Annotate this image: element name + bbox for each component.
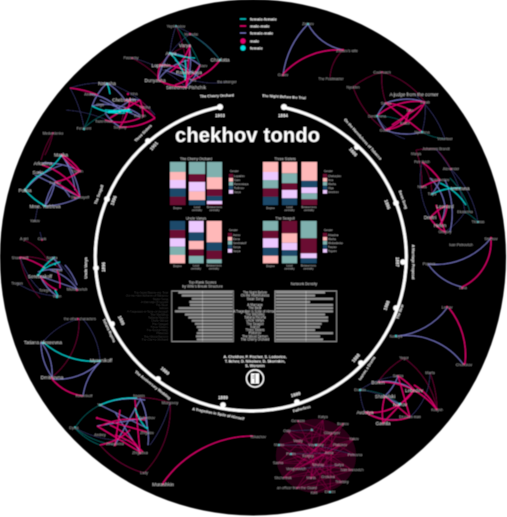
panel: stacked bars, Three Sisters: Local bbox=[287, 206, 293, 209]
network: The Seagull: Yakov bbox=[30, 219, 40, 223]
network: The Wedding: Lady bbox=[140, 471, 148, 475]
legend: edge and node types: female-male bbox=[250, 30, 274, 36]
network: Tatiana Repina: Kotelnikoff bbox=[76, 394, 92, 398]
network: On the Harmfulness of Tobacco bbox=[347, 70, 453, 141]
network: Uncle Vanya: Shamraeff bbox=[12, 256, 28, 260]
panel: stacked bars, The Seagull: Treplev bbox=[328, 245, 337, 249]
timeline labels: play titles and years: Swan Song bbox=[398, 190, 408, 209]
panel: stacked bars, Three Sisters: Betweenness bbox=[301, 206, 317, 209]
network: Swan Song: Ivan Petrovitch bbox=[449, 243, 473, 247]
network: Swan Song: Ivanovna bbox=[450, 186, 470, 191]
chart: top-rank scores by play: The Night Before the Trial bbox=[134, 290, 168, 294]
panel: stacked bars, Uncle Vanya: Elena bbox=[233, 237, 240, 241]
network: Swan Song: Gregory bbox=[439, 230, 452, 234]
panel: stacked bars, The Cherry Orchard: centrality bbox=[192, 209, 203, 212]
panel: stacked bars, Uncle Vanya: Uncle Vanya bbox=[186, 216, 206, 220]
legend: edge and node types: male bbox=[250, 38, 260, 44]
chart: top-rank scores by play: The Bear bbox=[156, 303, 168, 307]
network: Ivanov bbox=[354, 356, 443, 426]
network: The Cherry Orchard: Varya bbox=[179, 43, 191, 48]
play names between the two charts: The Wood Demon bbox=[242, 334, 268, 338]
network: Ivanov: Drunken man bbox=[399, 415, 421, 419]
network: Platonov: Vengerovich bbox=[286, 467, 306, 471]
network: The Cherry Orchard: Charlotta bbox=[210, 58, 230, 62]
network: Ivanov: Gavrila bbox=[376, 421, 391, 426]
network: Platonov: Nikolay bbox=[312, 463, 324, 467]
timeline ring bbox=[93, 104, 406, 411]
panel: stacked bars, The Seagull: Betweenness bbox=[301, 264, 317, 268]
network: The Seagull: Medvedenko bbox=[43, 132, 63, 136]
network: Ivanov: Shabelski bbox=[375, 394, 395, 399]
network: Platonov: Gerasim bbox=[291, 419, 305, 423]
panel: stacked bars, The Cherry Orchard: centrality bbox=[209, 209, 220, 212]
panel: stacked bars, The Cherry Orchard: Betweenness bbox=[207, 206, 223, 209]
timeline labels: play titles and years: 1884 bbox=[278, 113, 288, 118]
panel: stacked bars, The Seagull: Local bbox=[287, 264, 293, 268]
network: On the Harmfulness of Tobacco: A judge from the corner bbox=[390, 92, 439, 97]
network: Three Sisters: Olga bbox=[96, 103, 104, 107]
timeline labels: play titles and years: 1889 bbox=[290, 391, 302, 398]
play names between the two charts: A Tragedian in Spite of Himself bbox=[233, 309, 277, 313]
network: The Wedding: Zhigalova bbox=[132, 451, 148, 455]
network: The Bear: Smirnov bbox=[484, 237, 498, 241]
network: Ivanov: Borkin bbox=[371, 380, 385, 385]
network: The Wedding: Nyunin bbox=[133, 394, 145, 398]
network: The Cherry Orchard: Anya bbox=[166, 51, 177, 56]
network: The Wedding bbox=[69, 394, 178, 475]
network: The Bear: Luka bbox=[459, 286, 467, 290]
network: Tatiana Repina bbox=[24, 317, 113, 398]
play names between the two charts: On the Harmfulness bbox=[241, 294, 270, 298]
network: On the Harmfulness of Tobacco: Ivan bbox=[407, 108, 413, 112]
network: Ivanov: Ivanov bbox=[393, 402, 408, 407]
network: On the Harmfulness of Tobacco: Sasha bbox=[381, 102, 391, 106]
panel: stacked bars, Three Sisters: Masha bbox=[328, 182, 336, 186]
network: Platonov: Osip bbox=[283, 429, 291, 433]
network: Tatiana Repina: Tatiana Alexeevna bbox=[24, 340, 62, 345]
network: Three Sisters: Andrey bbox=[84, 92, 96, 96]
network: Uncle Vanya: Yefim bbox=[53, 294, 61, 298]
network: Swan Song: Dmitri bbox=[424, 215, 436, 220]
timeline labels: play titles and years: 1888 bbox=[351, 352, 361, 363]
network: The Seagull: Treplev bbox=[49, 181, 61, 185]
network: Swan Song: Svetlovidov bbox=[431, 178, 449, 182]
network: Swan Song: Helen bbox=[434, 223, 447, 228]
panel: stacked bars, Three Sisters: Chebutykin bbox=[328, 174, 342, 178]
network: Three Sisters: Natasha bbox=[98, 81, 116, 86]
timeline labels: play titles and years: 1887 bbox=[395, 257, 400, 267]
network: Swan Song: Tolya bbox=[428, 192, 436, 196]
panel: stacked bars, Uncle Vanya: Betweenness bbox=[206, 264, 222, 268]
network: Three Sisters: Irina bbox=[130, 92, 138, 96]
network: A Tragedian in Spite of Himself: Murashkin bbox=[152, 482, 174, 487]
timeline labels: play titles and years: The Night Before the Trial bbox=[262, 94, 306, 100]
network: Uncle Vanya: Michailovitch bbox=[67, 288, 87, 292]
timeline labels: play titles and years: Three Sisters bbox=[134, 124, 153, 143]
play names between the two charts: Tatiana Repina bbox=[244, 316, 266, 320]
panel: stacked bars, The Seagull: Gender bbox=[324, 228, 333, 232]
panel: stacked bars, Uncle Vanya: centrality bbox=[191, 268, 202, 270]
network: On the Harmfulness of Tobacco: Gusev bbox=[380, 128, 390, 132]
timeline labels: play titles and years: The Bear bbox=[396, 303, 405, 320]
network: Swan Song: Thomas bbox=[472, 220, 485, 224]
network: The Night Before the Trial bbox=[278, 22, 358, 81]
panel: stacked bars, Three Sisters: Irina bbox=[328, 178, 334, 182]
chart: top-rank scores by play: The Seagull bbox=[152, 322, 168, 326]
panel: stacked bars, The Seagull: Trigorin bbox=[328, 249, 337, 253]
network: The Cherry Orchard: Ranevskaya bbox=[176, 70, 202, 75]
network: Platonov: A. bbox=[310, 428, 314, 432]
title: chekhov tondo bbox=[175, 125, 320, 147]
play names between the two charts bbox=[233, 290, 277, 341]
network: Platonov: Shcherbuk bbox=[274, 476, 292, 480]
network: Ivanov: Kosykh bbox=[431, 408, 443, 412]
panel: stacked bars, The Cherry Orchard: Local bbox=[194, 206, 200, 209]
network: Platonov: Marko bbox=[274, 443, 284, 447]
network: The Seagull: Arkadina bbox=[34, 161, 53, 166]
chart: network density: Network Density bbox=[291, 282, 317, 286]
timeline labels: play titles and years: A Marriage Proposal bbox=[411, 245, 415, 279]
play names between the two charts: Ivanov bbox=[250, 325, 260, 329]
network: Platonov: Katya bbox=[318, 415, 328, 419]
network: The Cherry Orchard: Simeonov-Pishchik bbox=[166, 85, 207, 90]
network: Platonov: Sasha bbox=[273, 461, 283, 465]
network: Platonov: Petrin bbox=[286, 452, 296, 456]
network: Platonov: Glagolyev bbox=[324, 431, 340, 435]
panel: stacked bars, Uncle Vanya: Serebrakoff bbox=[233, 241, 247, 245]
play names between the two charts: The Night Before bbox=[243, 290, 267, 294]
play names between the two charts: Swan Song bbox=[247, 297, 263, 301]
panel: stacked bars, The Cherry Orchard bbox=[170, 157, 249, 212]
network: Swan Song: Nikita bbox=[418, 185, 426, 189]
panel: stacked bars, Uncle Vanya: Local bbox=[193, 264, 199, 268]
chart: top-rank scores by play: The Cherry Orchard bbox=[141, 337, 168, 341]
panel: stacked bars, The Cherry Orchard: The Cherry Orchard bbox=[180, 157, 212, 161]
chart: top-rank scores by play: Ivanov bbox=[159, 306, 168, 310]
play names between the two charts: The Wedding bbox=[246, 312, 265, 316]
network: The Seagull: A girl bbox=[20, 237, 28, 241]
network: Platonov: Ivan Ivanovich bbox=[341, 468, 363, 472]
chart: top-rank scores by play: The Wood Demon bbox=[144, 334, 168, 338]
chart: top-rank scores by play: Three Sisters bbox=[150, 325, 168, 329]
network: The Seagull: Shamrayeff bbox=[71, 196, 89, 200]
legend: edge and node types: female-female bbox=[250, 16, 277, 22]
network: Ivanov: Yegor bbox=[399, 356, 409, 360]
timeline labels: play titles and years: Uncle Vanya bbox=[84, 256, 88, 279]
timeline labels: play titles and years: On the Harmfulness of Tobacco bbox=[343, 118, 383, 161]
legend: edge and node types: male-male bbox=[250, 24, 270, 28]
timeline labels: play titles and years: The Seagull bbox=[94, 184, 104, 205]
network: The Wedding: Mozgovoy bbox=[162, 401, 178, 405]
network: The Seagull: Mme. Yarbleva bbox=[29, 204, 61, 209]
network: Tatiana Repina: Myasnikoff bbox=[90, 358, 113, 363]
network: Platonov: Petrovna bbox=[348, 453, 362, 457]
network: Uncle Vanya: Trogon bbox=[11, 282, 23, 286]
network: The Bear: Popova bbox=[423, 262, 435, 266]
play names between the two charts: Platonov bbox=[249, 331, 262, 335]
network: Ivanov: Marfa bbox=[425, 371, 435, 375]
network: Swan Song: Johannes Brandt bbox=[422, 147, 450, 151]
panel: stacked bars, Three Sisters: Three Sisters bbox=[274, 157, 296, 161]
network: The Seagull bbox=[18, 132, 89, 241]
network: Uncle Vanya: Marya bbox=[52, 268, 62, 272]
timeline labels: play titles and years: 1888 bbox=[383, 300, 391, 311]
network: The Seagull: Sorin bbox=[33, 170, 44, 175]
play names between the two charts: The Cherry Orchard bbox=[241, 337, 269, 341]
chart: top-rank scores by play: The Wedding bbox=[150, 312, 168, 316]
panel: stacked bars, The Cherry Orchard: Trofimov bbox=[234, 186, 245, 190]
chart: top-rank scores by play: A Marriage Proposal bbox=[141, 300, 168, 304]
network: The Wedding: Aplombov bbox=[139, 416, 155, 420]
panel: stacked bars, Uncle Vanya: Sonya bbox=[233, 245, 241, 249]
network: Swan Song: Ekaterina bbox=[457, 210, 473, 214]
network: Swan Song: Alexander bbox=[443, 167, 460, 171]
chart: top-rank scores by play: Uncle Vanya bbox=[151, 319, 168, 323]
network: Platonov: Platonov bbox=[333, 443, 347, 447]
network: The Bear bbox=[423, 237, 498, 290]
icon: book badge bbox=[246, 370, 264, 387]
network: Ivanov: Dudkin bbox=[354, 388, 366, 392]
network: Platonov: Sergey bbox=[302, 454, 314, 458]
network: On the Harmfulness of Tobacco: Sarah bbox=[420, 100, 430, 104]
network: On the Harmfulness of Tobacco: Nyukhin bbox=[347, 86, 359, 90]
panel: stacked bars, Three Sisters: centrality bbox=[304, 209, 315, 212]
panel: stacked bars, Three Sisters bbox=[263, 157, 342, 212]
network: Swan Song bbox=[411, 147, 485, 247]
network: Platonov: Bugrov bbox=[337, 422, 349, 426]
network: The Night Before the Trial: Zaitsev bbox=[302, 22, 314, 26]
panel: stacked bars, The Seagull: The Seagull bbox=[275, 216, 295, 220]
panel: stacked bars, Uncle Vanya: Degree bbox=[173, 265, 182, 268]
chart: network density bbox=[275, 282, 337, 342]
network: Swan Song: Leonard bbox=[436, 204, 454, 209]
network: The Wedding: Yat bbox=[97, 403, 103, 407]
chart: top-rank scores by play: The Anniversary bbox=[146, 328, 168, 332]
network: Platonov: an officer from the Guard bbox=[277, 486, 317, 490]
network: The Cherry Orchard: Yepikhodov bbox=[167, 24, 185, 28]
network: A Tragedian in Spite of Himself bbox=[152, 435, 266, 487]
timeline labels: play titles and years: 1886 bbox=[383, 199, 392, 210]
timeline labels: play titles and years: 1903 bbox=[215, 113, 225, 118]
chart: top-rank scores by play bbox=[126, 280, 233, 342]
network: On the Harmfulness of Tobacco: Cockroach bbox=[373, 70, 391, 74]
network: The Night Before the Trial: The Postmaster bbox=[318, 77, 344, 81]
panel: stacked bars, The Seagull bbox=[263, 216, 343, 270]
panel: stacked bars, Three Sisters: Olga bbox=[328, 186, 334, 190]
network: Swan Song: Petr Ilyich bbox=[414, 160, 430, 164]
chart: top-rank scores by play: by Wife's Break Structure bbox=[182, 284, 223, 288]
network: Three Sisters: Masha bbox=[140, 106, 150, 110]
network: Platonov: Maria bbox=[306, 476, 316, 480]
credits bbox=[224, 355, 286, 368]
panel: stacked bars, The Seagull: Masha bbox=[328, 237, 336, 241]
network: On the Harmfulness of Tobacco: Kiskin bbox=[400, 122, 410, 126]
panel: stacked bars, Three Sisters: Degree bbox=[266, 207, 275, 210]
network: A Marriage Proposal: Chubukov bbox=[456, 363, 472, 367]
network: The Cherry Orchard: Yermolai bbox=[184, 32, 198, 36]
timeline labels: play titles and years: A Tragedian in Spite of Himself bbox=[192, 407, 245, 421]
timeline labels: play titles and years bbox=[84, 93, 415, 421]
panel: stacked bars, The Seagull: Degree bbox=[266, 265, 275, 268]
network: Three Sisters: Tuzenbach bbox=[95, 120, 113, 124]
panel: stacked bars, Three Sisters: Vershinin bbox=[328, 190, 339, 194]
chart: top-rank scores by play: Platonov bbox=[156, 331, 168, 335]
network: The Cherry Orchard bbox=[124, 24, 237, 90]
network: The Cherry Orchard: Firs bbox=[190, 78, 196, 82]
network: A Marriage Proposal bbox=[390, 306, 472, 367]
network: The Wedding: Zhigalov bbox=[140, 431, 154, 435]
panel: stacked bars, Three Sisters: centrality bbox=[284, 209, 295, 212]
network: The Wedding: Andrey bbox=[94, 433, 106, 437]
chart: top-rank scores by play: Tatiana Repina bbox=[148, 316, 168, 320]
panel: stacked bars, The Cherry Orchard: Ranevskaya bbox=[234, 182, 249, 186]
network: Three Sisters: Solyony bbox=[114, 126, 127, 130]
network: The Seagull: Cook bbox=[38, 237, 46, 241]
chart: top-rank scores by play: Swan Song bbox=[153, 297, 168, 301]
network: Uncle Vanya: Nagha bbox=[47, 256, 57, 260]
network: On the Harmfulness of Tobacco: Volunteer bbox=[437, 137, 453, 141]
panel: stacked bars, The Seagull: centrality bbox=[303, 268, 314, 270]
network: Platonov: Dimitri bbox=[325, 490, 335, 494]
network: Uncle Vanya: Telegin bbox=[39, 288, 51, 292]
network: The Cherry Orchard: Gaev bbox=[199, 64, 207, 68]
panel: stacked bars, Uncle Vanya bbox=[170, 216, 247, 270]
network: Ivanov: Avdotya bbox=[357, 410, 374, 415]
network: Platonov: Yakov bbox=[349, 437, 359, 441]
network: Platonov: Voynitsky bbox=[308, 443, 324, 447]
network: The Night Before the Trial: Gusev bbox=[278, 73, 288, 77]
panel: stacked bars, The Seagull: centrality bbox=[284, 268, 295, 270]
timeline labels: play titles and years: Tatiana Repina bbox=[102, 318, 116, 344]
play names between the two charts: Uncle Vanya bbox=[246, 319, 264, 323]
chart: top-rank scores by play: On the Harmfulness of Tobacco bbox=[126, 294, 168, 298]
network: Platonov: Triletsky bbox=[335, 480, 349, 484]
timeline labels: play titles and years: 1901 bbox=[149, 140, 159, 151]
network: The Cherry Orchard: the stranger bbox=[217, 80, 237, 84]
network: The Cherry Orchard: Passerby bbox=[124, 56, 139, 60]
panel: stacked bars, The Cherry Orchard: Gender bbox=[230, 169, 239, 173]
panel: stacked bars, The Seagull: Medvedenko bbox=[328, 241, 343, 245]
network: On the Harmfulness of Tobacco: Nyukhina bbox=[415, 130, 429, 134]
network: Tatiana Repina: Dmitrievna bbox=[41, 375, 64, 380]
network: Tatiana Repina: the other characters bbox=[64, 317, 96, 321]
network: A Marriage Proposal: Lomov bbox=[442, 306, 453, 310]
network: Platonov: Vasily bbox=[293, 439, 303, 443]
network: Platonov bbox=[273, 415, 363, 495]
network: The Night Before the Trial: Zaitsev's wife bbox=[336, 49, 358, 53]
play names between the two charts: A Marriage bbox=[247, 303, 263, 307]
timeline labels: play titles and years: 1889 bbox=[160, 366, 171, 376]
network: Three Sisters: Chebutykin bbox=[112, 98, 136, 102]
network: Platonov: Sofya bbox=[334, 463, 344, 467]
network: The Cherry Orchard: Dunyasha bbox=[144, 78, 166, 83]
play names between the two charts: Three Sisters bbox=[246, 328, 265, 332]
timeline labels: play titles and years: Fatherless bbox=[293, 405, 311, 413]
panel: stacked bars, Uncle Vanya: Astrov bbox=[233, 233, 241, 237]
panel: stacked bars, The Cherry Orchard: Lopakhin bbox=[234, 174, 245, 178]
credits: S. Woronin bbox=[245, 364, 265, 368]
network: Swan Song: Marya bbox=[411, 152, 421, 156]
panel: stacked bars, The Cherry Orchard: Gaev bbox=[234, 178, 241, 182]
chart: top-rank scores by play: Top-Rank Scores bbox=[189, 280, 216, 284]
timeline labels: play titles and years: 1889 bbox=[117, 315, 126, 326]
network: The Seagull: Trigorin bbox=[71, 170, 83, 174]
network: Three Sisters: Kulygin bbox=[134, 114, 146, 118]
timeline labels: play titles and years: 1889 bbox=[218, 395, 228, 400]
network: The Wedding: Dyms bbox=[69, 426, 79, 430]
panel: stacked bars, Three Sisters: Gender bbox=[324, 169, 333, 173]
network: Three Sisters: Ferapont bbox=[77, 126, 91, 130]
play names between the two charts: The Seagull bbox=[246, 322, 264, 326]
credits: A. Chekhov, P. Fischer, S. Lodovico, bbox=[224, 355, 286, 359]
legend: edge and node types bbox=[240, 16, 277, 51]
network: Platonov: Anna bbox=[325, 451, 333, 455]
network: The Seagull: Polina bbox=[18, 188, 32, 193]
network: A Marriage Proposal: Natalya bbox=[390, 334, 402, 338]
timeline labels: play titles and years: 1896 bbox=[101, 262, 106, 272]
panel: stacked bars, The Cherry Orchard: Degree bbox=[173, 207, 182, 210]
network: Platonov: Grekova bbox=[321, 475, 335, 479]
credits: T. Ilchev, D. Nikolaev, D. Skorinkin, bbox=[225, 360, 285, 364]
network: Ivanov: Sasha bbox=[393, 374, 403, 378]
panel: stacked bars, The Seagull: Arkadina bbox=[328, 233, 339, 237]
panel: stacked bars, Uncle Vanya: centrality bbox=[209, 268, 220, 270]
panel: stacked bars, Uncle Vanya: Gender bbox=[229, 228, 238, 232]
chart: top-rank scores by play: A Tragedian in Spite of Himself bbox=[127, 309, 168, 313]
play names between the two charts: The Bear bbox=[248, 306, 262, 310]
timeline labels: play titles and years: 1896 bbox=[110, 195, 118, 206]
network: The Seagull: Masha bbox=[54, 152, 68, 158]
timeline labels: play titles and years: The Cherry Orchard bbox=[200, 93, 234, 99]
timeline labels: play titles and years: The Anniversary Wedding bbox=[134, 370, 171, 400]
network: Three Sisters bbox=[66, 81, 155, 130]
timeline labels: play titles and years: Ivanov, a Drama bbox=[358, 355, 377, 381]
network: On the Harmfulness of Tobacco: Dimitrievna bbox=[368, 114, 386, 118]
timeline labels: play titles and years: 1886 bbox=[348, 147, 359, 158]
network: Platonov: Kirill bbox=[311, 491, 318, 495]
network: The Wedding: Zmeyukina bbox=[106, 442, 124, 446]
legend: edge and node types: female bbox=[250, 46, 263, 50]
panel: stacked bars, The Cherry Orchard: Varya bbox=[234, 190, 241, 194]
network: Uncle Vanya bbox=[11, 240, 87, 298]
network: The Cherry Orchard: Lopakhin bbox=[151, 63, 171, 68]
panel: stacked bars, Uncle Vanya: Vanya bbox=[233, 249, 241, 253]
network: Ivanov: Lebedev bbox=[405, 388, 424, 393]
network: Uncle Vanya: Serebrakoff bbox=[28, 274, 53, 279]
network: A Tragedian in Spite of Himself: Tolkachov bbox=[250, 435, 266, 439]
